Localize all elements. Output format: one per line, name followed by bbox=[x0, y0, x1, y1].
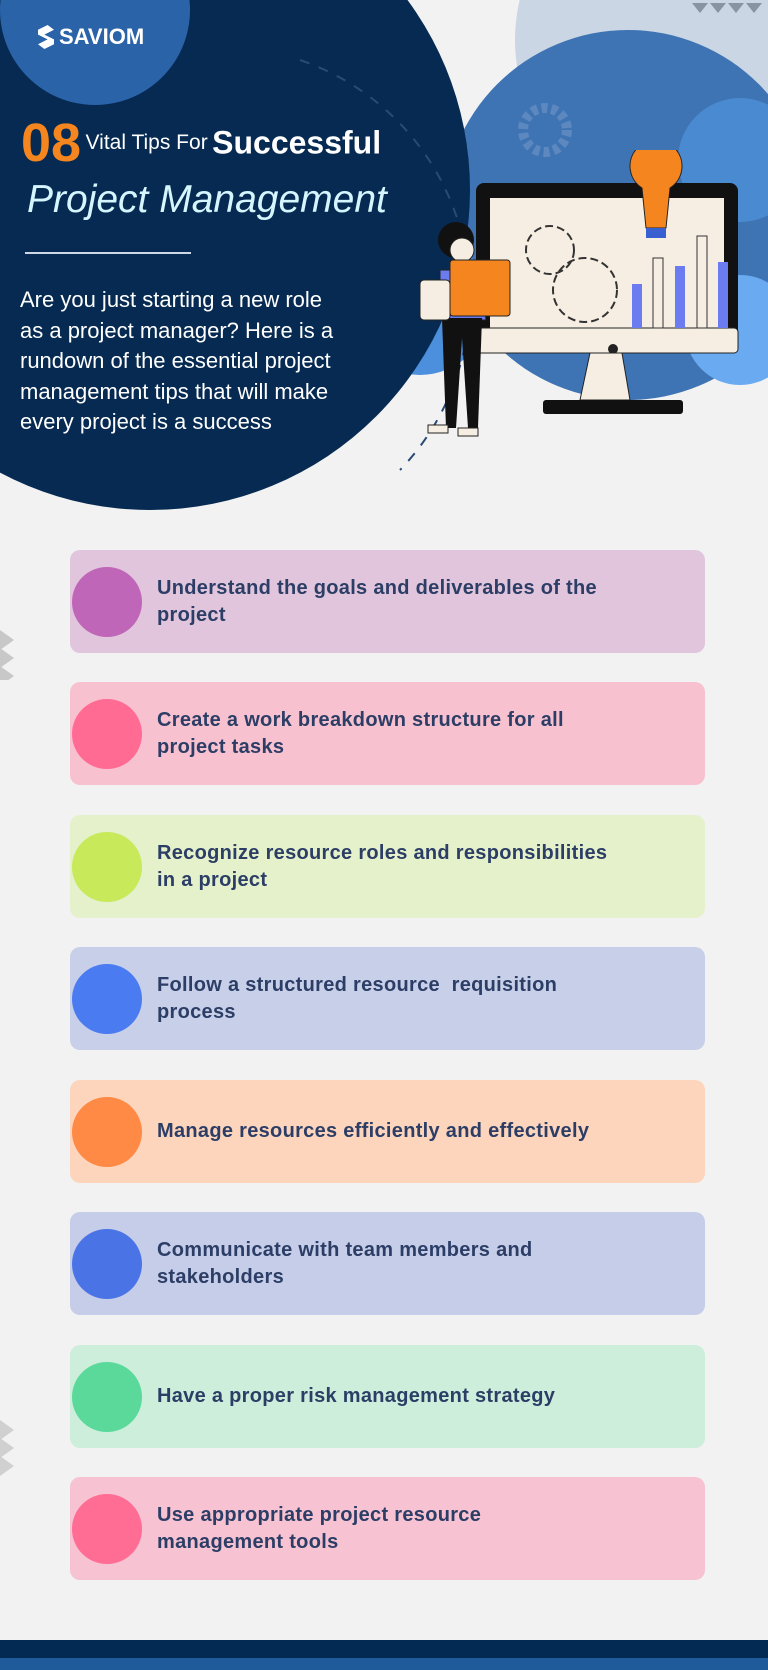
icon: goal flag bbox=[72, 567, 142, 637]
card 6 bbox=[70, 1212, 705, 1315]
icon: manage bbox=[72, 1097, 142, 1167]
text: Understand the goals and deliverables of the bbox=[157, 576, 597, 598]
text: management tools bbox=[157, 1530, 338, 1552]
intro paragraph: rundown of the essential project bbox=[20, 348, 331, 373]
icon: tools bbox=[72, 1494, 142, 1564]
intro paragraph bbox=[20, 287, 334, 434]
side decorations bbox=[0, 630, 14, 680]
card 2 bbox=[70, 682, 705, 785]
card 3 bbox=[70, 815, 705, 918]
text: Use appropriate project resource bbox=[157, 1504, 481, 1526]
text bbox=[157, 974, 557, 1022]
card 4 bbox=[70, 947, 705, 1050]
title: Project Management bbox=[27, 178, 387, 221]
intro paragraph: Are you just starting a new role bbox=[20, 287, 322, 312]
title bbox=[21, 113, 388, 221]
icon: process bbox=[72, 964, 142, 1034]
icon: ruler bbox=[72, 699, 142, 769]
text: stakeholders bbox=[157, 1266, 284, 1288]
text bbox=[157, 576, 597, 626]
text: process bbox=[157, 1000, 236, 1022]
icon: roles bbox=[72, 832, 142, 902]
text bbox=[157, 842, 607, 890]
illustration: monitor and person bbox=[420, 150, 738, 436]
card 1 bbox=[70, 550, 705, 653]
logo: SAVIOM bbox=[59, 24, 144, 49]
text bbox=[157, 1504, 481, 1552]
card 7 bbox=[70, 1345, 705, 1448]
intro paragraph: every project is a success bbox=[20, 409, 272, 434]
text: project tasks bbox=[157, 736, 284, 758]
title: 08 Vital Tips For Successful bbox=[21, 113, 381, 173]
intro paragraph: as a project manager? Here is a bbox=[20, 318, 333, 342]
text: Follow a structured resource requisition bbox=[157, 974, 557, 996]
footer band bbox=[0, 1640, 768, 1670]
text bbox=[157, 708, 564, 758]
text: in a project bbox=[157, 868, 267, 890]
text: project bbox=[157, 604, 226, 626]
icon: communicate bbox=[72, 1229, 142, 1299]
text: Manage resources efficiently and effectively bbox=[157, 1120, 589, 1142]
intro paragraph: management tips that will make bbox=[20, 378, 328, 404]
text: Create a work breakdown structure for all bbox=[157, 708, 564, 730]
text: Have a proper risk management strategy bbox=[157, 1385, 555, 1407]
card 5 bbox=[70, 1080, 705, 1183]
divider bbox=[25, 252, 191, 254]
card 8 bbox=[70, 1477, 705, 1580]
header background shapes bbox=[0, 0, 768, 510]
icon: risk bbox=[72, 1362, 142, 1432]
text: Communicate with team members and bbox=[157, 1238, 533, 1260]
text bbox=[157, 1238, 533, 1288]
text: Recognize resource roles and responsibilities bbox=[157, 842, 607, 864]
